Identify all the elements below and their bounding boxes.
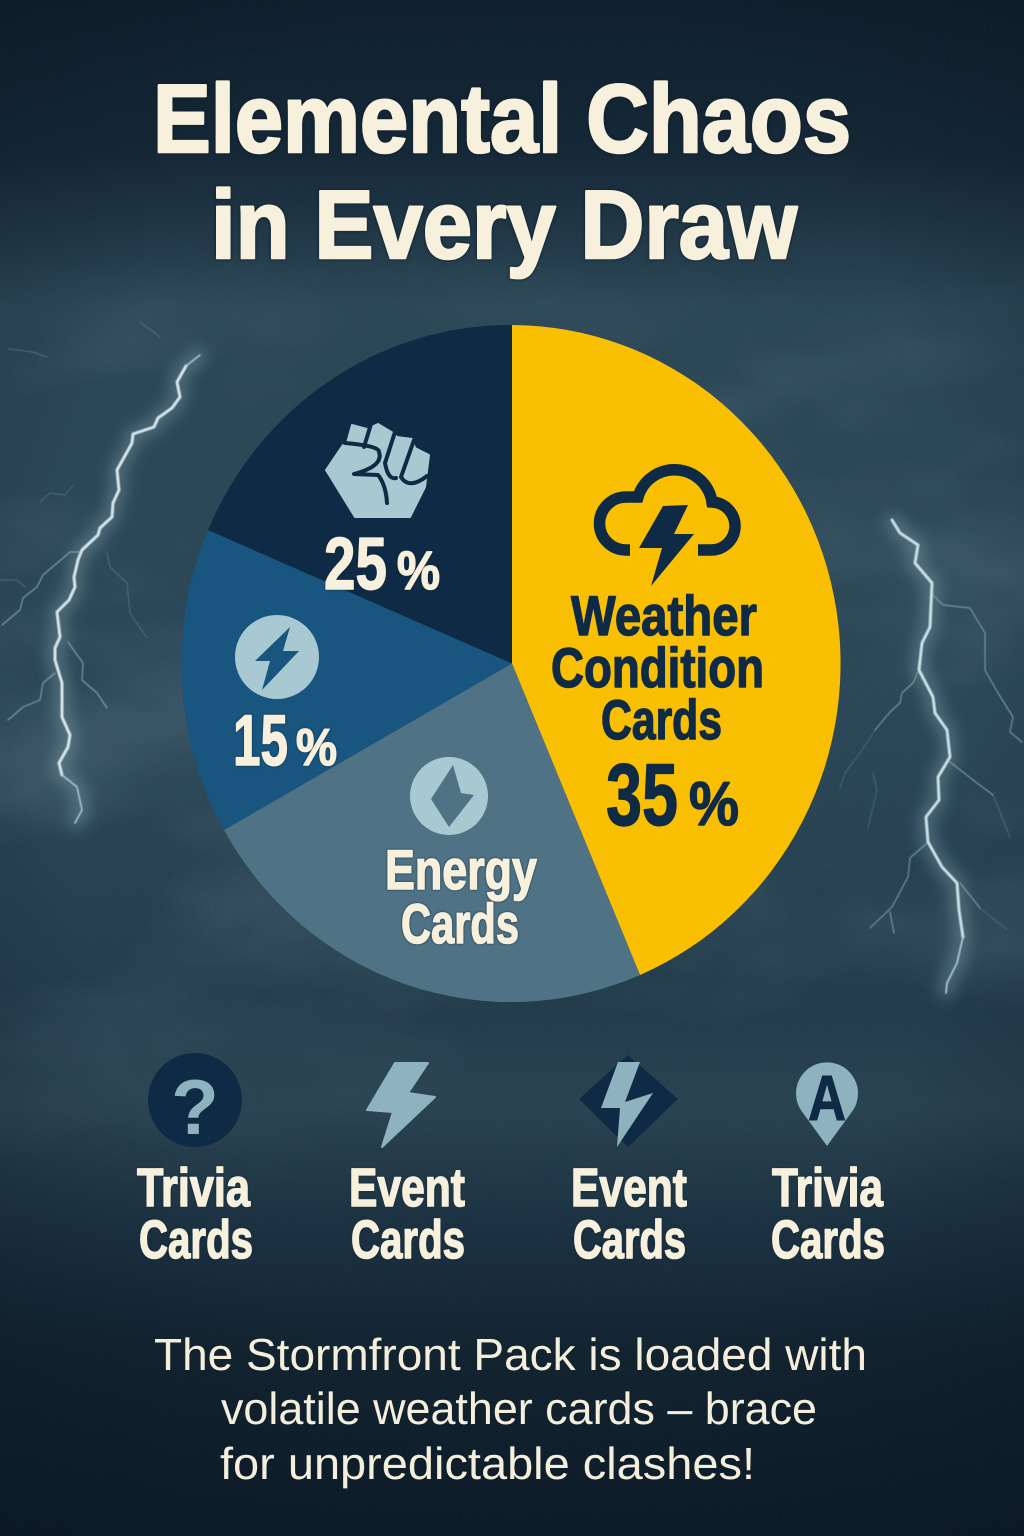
caption text: for unpredictable clashes! [220, 1438, 755, 1489]
label: event cards: Cards [573, 1210, 686, 1270]
slice: 25% [208, 325, 512, 664]
label: trivia cards: Cards [139, 1210, 253, 1270]
value: 25%: 25 [324, 522, 387, 605]
slice: weather condition cards 35% [512, 325, 841, 975]
label: trivia cards: Trivia [137, 1158, 251, 1218]
icon: lightning bolt [367, 1063, 435, 1147]
icon: map pin with letter [796, 1062, 858, 1146]
icon: bolt on diamond [579, 1055, 678, 1147]
caption text: volatile weather cards – brace [221, 1383, 817, 1434]
icon: bolt in circle [235, 615, 319, 699]
label: trivia cards: Cards [771, 1210, 885, 1270]
lightning bolt right [840, 520, 1022, 993]
title: Elemental Chaos [153, 64, 851, 173]
label: trivia cards [137, 1158, 253, 1270]
caption text: The Stormfront Pack is loaded with [154, 1329, 867, 1380]
slice: 15% [181, 530, 512, 830]
label: weather condition cards [551, 584, 764, 751]
value: 15%: 15 [233, 701, 288, 781]
legend item: event cards diamond [571, 1055, 687, 1270]
icon: storm cloud with bolt [600, 470, 735, 586]
legend item: trivia cards pin [771, 1062, 885, 1270]
caption text [154, 1329, 867, 1489]
icon: question mark circle: ? [171, 1063, 219, 1151]
label: weather condition cards: Condition [551, 636, 764, 699]
legend item: event cards bolt [349, 1063, 465, 1270]
value: 15%: % [296, 719, 337, 777]
label: event cards: Event [571, 1158, 687, 1218]
label: event cards [571, 1158, 687, 1270]
label: event cards: Event [349, 1158, 465, 1218]
value: 35%: 35 [606, 745, 678, 844]
icon: map pin with letter: A [808, 1062, 846, 1134]
title [153, 64, 851, 279]
value: 25%: % [397, 541, 440, 601]
title: in Every Draw [211, 170, 797, 279]
pie chart [181, 325, 841, 1002]
label: event cards: Cards [351, 1210, 465, 1270]
label: event cards [349, 1158, 465, 1270]
icon: energy circle [410, 757, 488, 835]
slice: energy cards [224, 664, 640, 1002]
value: 35%: % [689, 770, 739, 839]
label: trivia cards [771, 1158, 885, 1270]
legend item: trivia cards question mark [137, 1053, 253, 1270]
label: trivia cards: Trivia [772, 1158, 884, 1218]
label: energy cards: Energy [385, 838, 537, 901]
icon: question mark circle [148, 1053, 242, 1151]
label: weather condition cards: Weather [571, 584, 757, 647]
lightning bolt left [0, 322, 200, 823]
legend row [137, 1053, 885, 1270]
label: energy cards [385, 838, 537, 955]
icon: fist [326, 424, 429, 517]
label: weather condition cards: Cards [601, 688, 722, 751]
label: energy cards: Cards [401, 892, 519, 955]
